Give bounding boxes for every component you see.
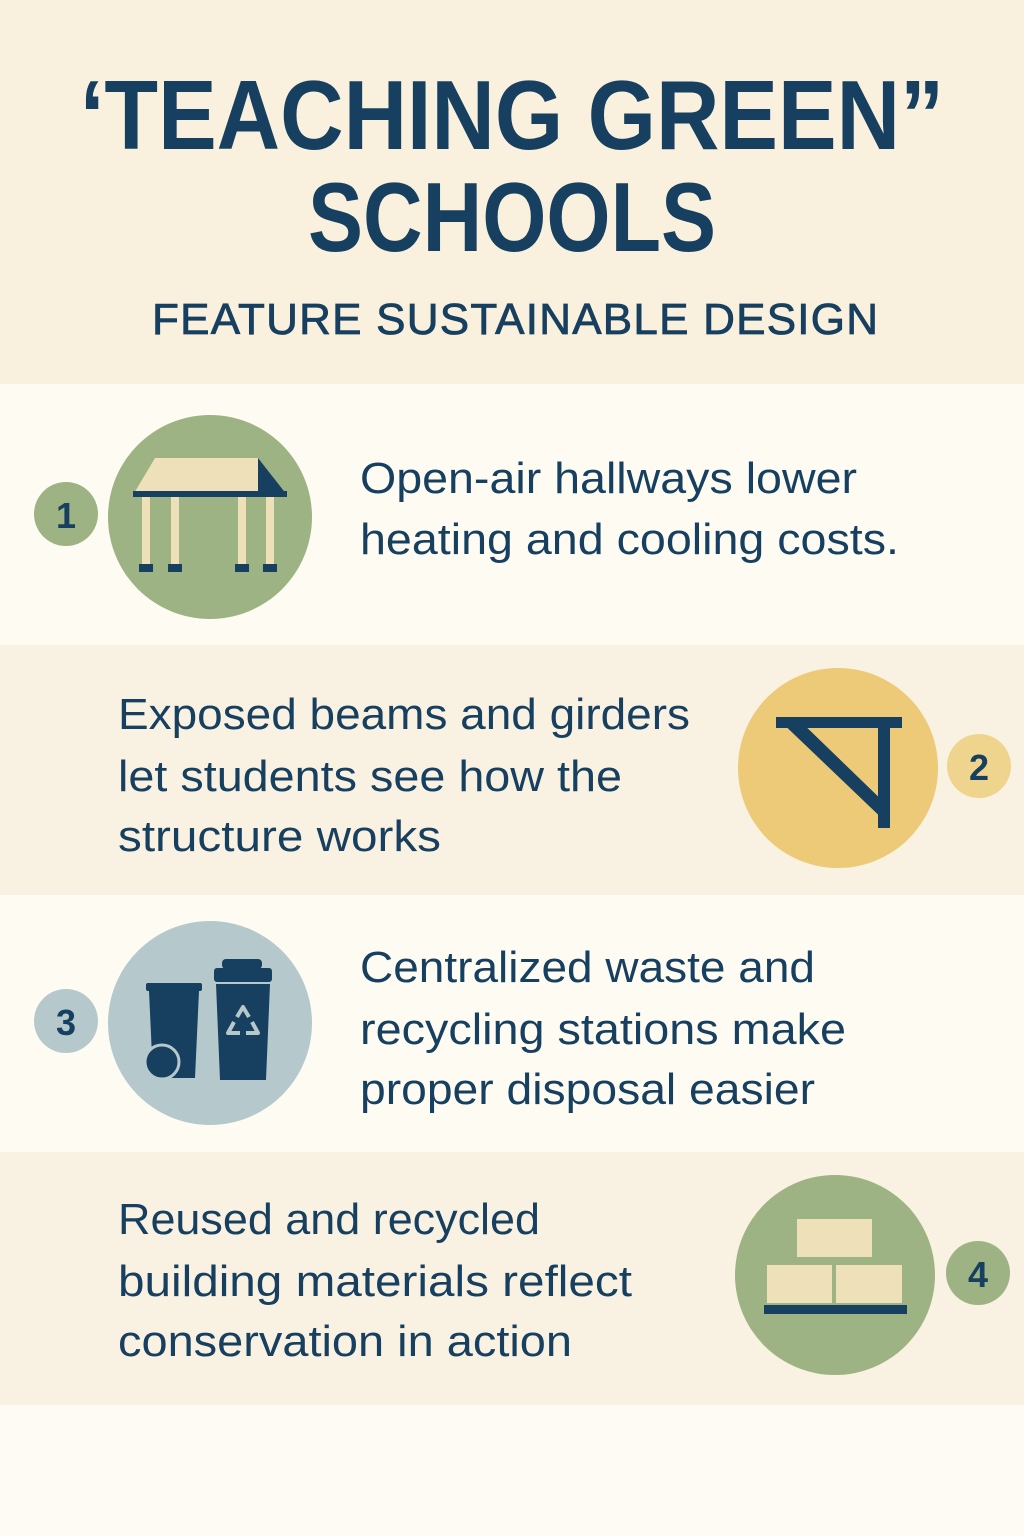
- badge 2: [947, 734, 1011, 798]
- badge 4: 4: [968, 1254, 988, 1295]
- text 2: [118, 690, 690, 861]
- badge 1: [34, 482, 98, 546]
- text 1: [360, 454, 899, 564]
- text 3: [360, 943, 846, 1114]
- badge 3: [34, 989, 98, 1053]
- text 2: let students see how the: [118, 752, 622, 801]
- badge 3: 3: [56, 1002, 76, 1043]
- header panel: [0, 0, 1024, 384]
- panel: item 3: [0, 895, 1024, 1152]
- text 3: Centralized waste and: [360, 943, 815, 992]
- text 3: proper disposal easier: [360, 1065, 815, 1114]
- text 4: conservation in action: [118, 1317, 572, 1366]
- icon: girder: [738, 668, 938, 868]
- title: [80, 60, 944, 272]
- title: SCHOOLS: [308, 162, 716, 272]
- text 1: heating and cooling costs.: [360, 515, 899, 564]
- panel: item 1: [0, 384, 1024, 645]
- badge 4: [946, 1241, 1010, 1305]
- text 1: Open-air hallways lower: [360, 454, 857, 503]
- text 4: building materials reflect: [118, 1257, 632, 1306]
- icon: bins: [108, 921, 312, 1125]
- badge 2: 2: [969, 747, 989, 788]
- text 4: [118, 1195, 632, 1366]
- text 3: recycling stations make: [360, 1005, 846, 1054]
- title: ‘TEACHING GREEN”: [80, 60, 944, 170]
- text 2: Exposed beams and girders: [118, 690, 690, 739]
- badge 1: 1: [56, 495, 76, 536]
- icon: bricks: [735, 1175, 935, 1375]
- text 4: Reused and recycled: [118, 1195, 540, 1244]
- panel: item 4: [0, 1152, 1024, 1405]
- subtitle: FEATURE SUSTAINABLE DESIGN: [152, 295, 878, 344]
- text 2: structure works: [118, 812, 441, 861]
- icon: open-air hallway: [108, 415, 312, 619]
- panel: item 2: [0, 645, 1024, 895]
